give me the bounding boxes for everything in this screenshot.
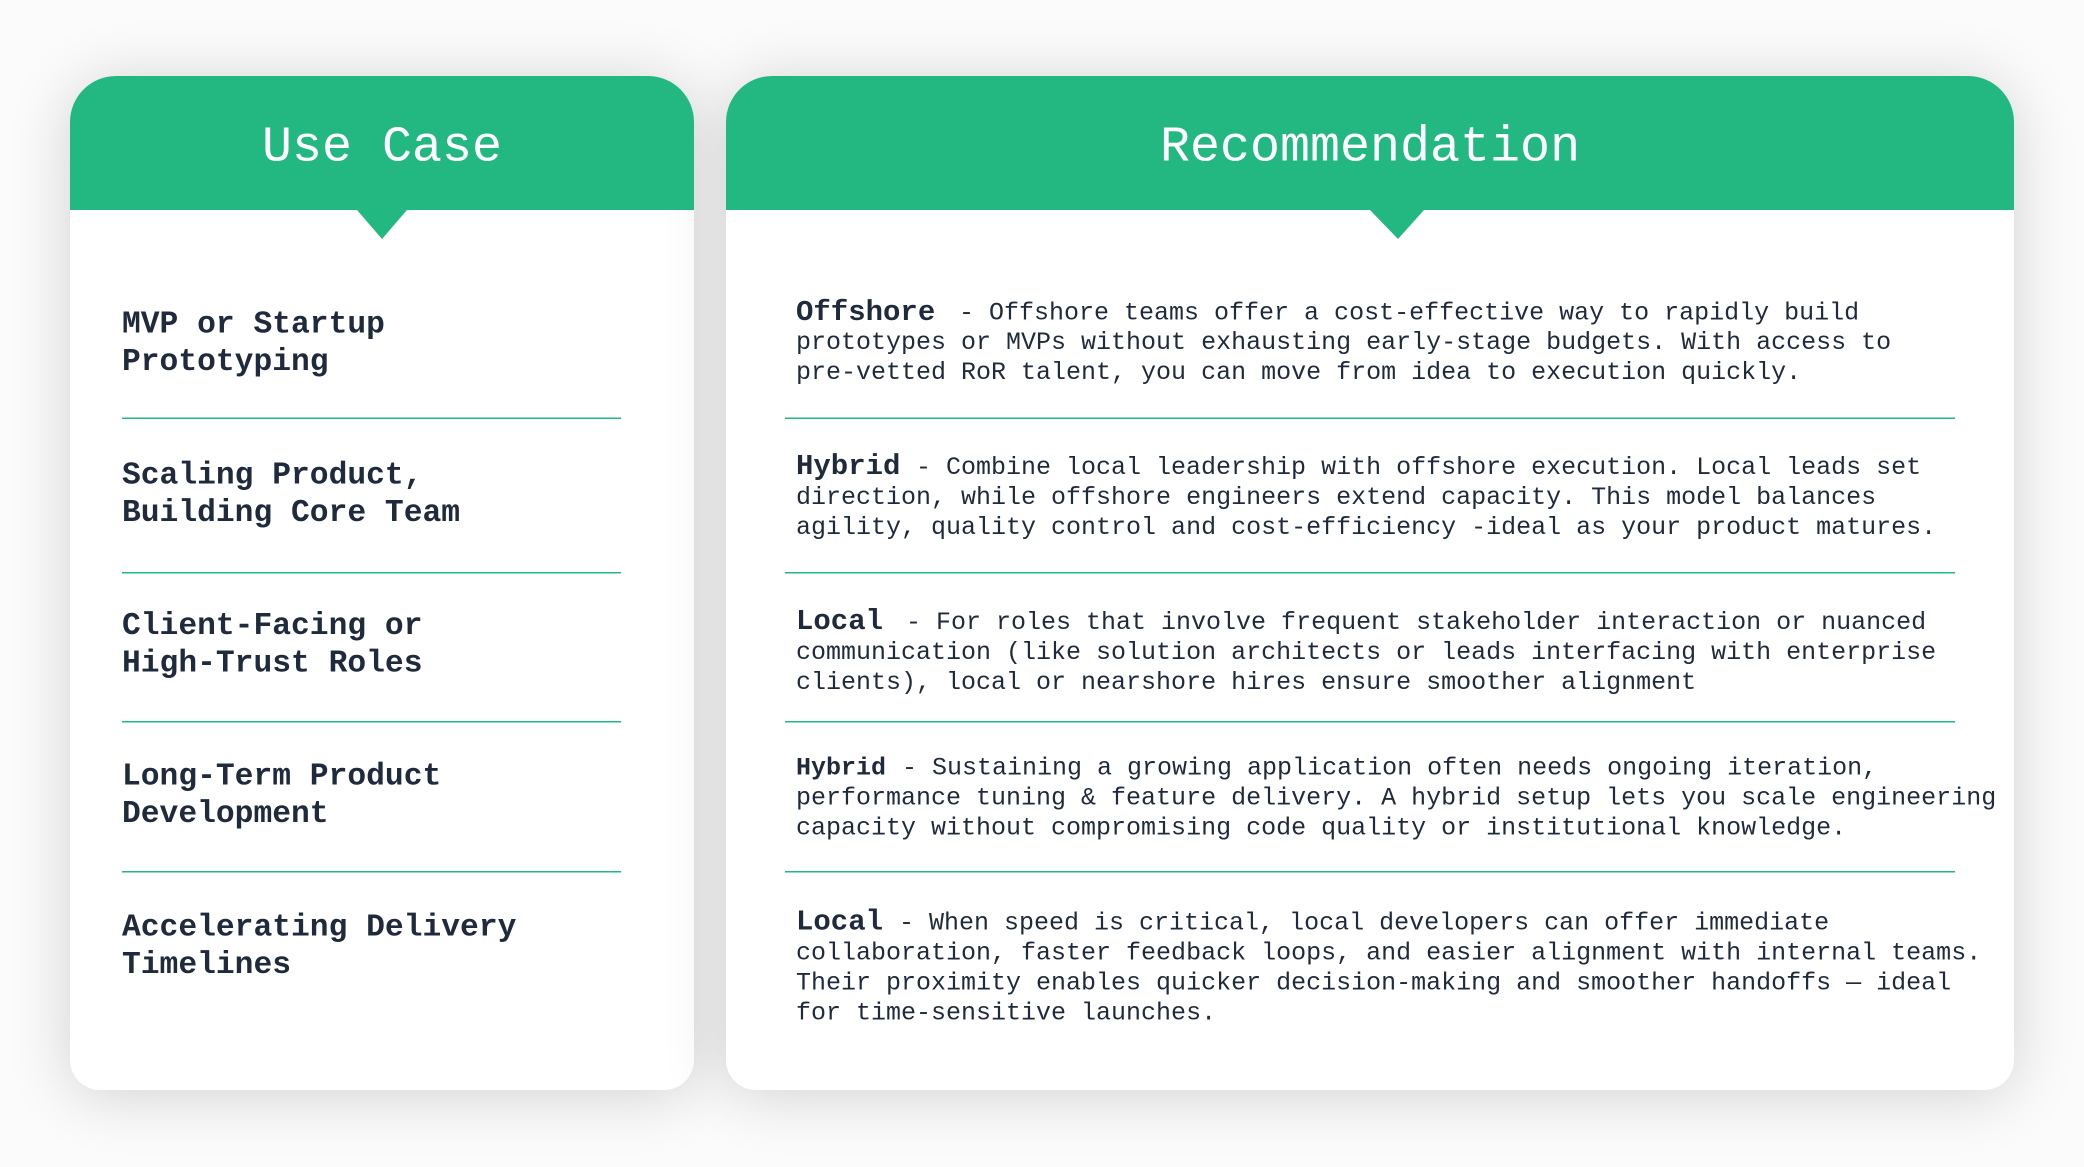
recommendation: local client-facing xyxy=(796,605,1936,697)
header: recommendation xyxy=(726,76,2014,239)
use case: accelerating delivery timelines: Timelines xyxy=(122,948,291,983)
use case: scaling product: Building Core Team xyxy=(122,496,460,531)
recommendation: hybrid core team: agility, quality control and cost-efficiency -ideal as your product matures. xyxy=(796,513,1936,542)
use case: MVP or startup prototyping: Prototyping xyxy=(122,345,329,380)
recommendation: local client-facing: Local xyxy=(796,605,883,638)
recommendation: offshore xyxy=(796,296,1891,387)
recommendation: local accelerated delivery xyxy=(796,906,1981,1028)
recommendation: hybrid core team xyxy=(796,450,1936,542)
recommendation: local accelerated delivery: Their proximity enables quicker decision-making and smoother handoffs — ideal xyxy=(796,968,1951,998)
heading: recommendation: Recommendation xyxy=(1160,120,1580,176)
recommendation: hybrid long-term xyxy=(796,754,1996,842)
recommendation: local accelerated delivery: - When speed is critical, local developers can offer immediate xyxy=(899,908,1829,938)
recommendation: hybrid long-term: - Sustaining a growing application often needs ongoing iteration, xyxy=(902,754,1877,782)
recommendation: hybrid core team: - Combine local leadership with offshore execution. Local leads set xyxy=(916,453,1921,482)
use case: MVP or startup prototyping: MVP or Startup xyxy=(122,308,385,342)
use case: accelerating delivery timelines: Accelerating Delivery xyxy=(122,910,517,946)
recommendation list xyxy=(796,296,1996,1028)
recommendation: hybrid long-term: Hybrid xyxy=(796,754,886,782)
use case: client-facing roles: High-Trust Roles xyxy=(122,646,422,682)
use case list xyxy=(122,308,517,983)
use case: long-term product development: Long-Term Product xyxy=(122,760,441,794)
use case: scaling product: Scaling Product, xyxy=(122,458,422,494)
recommendation: offshore: Offshore xyxy=(796,296,935,329)
recommendation: hybrid core team: Hybrid xyxy=(796,450,900,483)
recommendation: hybrid core team: direction, while offshore engineers extend capacity. This model balances xyxy=(796,483,1876,512)
use case: long-term product development: Development xyxy=(122,797,329,832)
recommendation: offshore: prototypes or MVPs without exhausting early-stage budgets. With access to xyxy=(796,328,1891,357)
recommendation: local accelerated delivery: Local xyxy=(796,906,883,938)
recommendation: hybrid long-term: capacity without compromising code quality or institutional knowledge. xyxy=(796,814,1846,842)
recommendation: local client-facing: communication (like solution architects or leads interfacing with enterprise xyxy=(796,638,1936,667)
panel: use case background xyxy=(70,76,694,1090)
recommendation: offshore: pre-vetted RoR talent, you can move from idea to execution quickly. xyxy=(796,358,1801,387)
header: use case xyxy=(70,76,694,239)
heading: use case: Use Case xyxy=(262,120,502,176)
recommendation: local accelerated delivery: for time-sensitive launches. xyxy=(796,998,1216,1028)
recommendation: local client-facing: clients), local or nearshore hires ensure smoother alignment xyxy=(796,668,1696,697)
recommendation: hybrid long-term: performance tuning & feature delivery. A hybrid setup lets you scale engineering xyxy=(796,784,1996,812)
use case: client-facing roles: Client-Facing or xyxy=(122,609,422,644)
recommendation: offshore: - Offshore teams offer a cost-effective way to rapidly build xyxy=(959,298,1859,328)
recommendation: local accelerated delivery: collaboration, faster feedback loops, and easier alignment with internal teams. xyxy=(796,938,1981,968)
panel: recommendation background xyxy=(726,76,2014,1090)
recommendation: local client-facing: - For roles that involve frequent stakeholder interaction or nuanced xyxy=(906,608,1926,637)
